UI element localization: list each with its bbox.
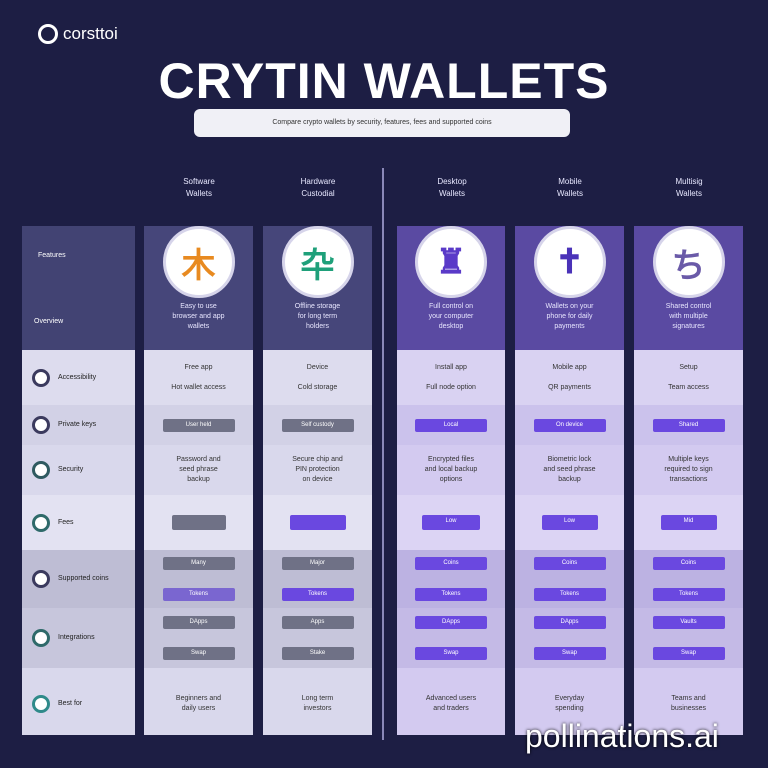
text: required to sign	[664, 466, 713, 473]
text: Low	[445, 518, 456, 524]
text: Many	[191, 560, 206, 566]
text: Tokens	[679, 591, 698, 597]
text: PIN protection	[295, 466, 340, 473]
text: Apps	[311, 619, 324, 625]
text: Shared control	[666, 303, 711, 310]
text: Full node option	[426, 384, 476, 390]
text: Everyday	[555, 694, 584, 702]
text: Tokens	[189, 591, 208, 597]
divider	[382, 168, 384, 740]
text: backup	[187, 476, 210, 483]
text: Mobile	[558, 177, 582, 186]
text: and traders	[433, 704, 469, 712]
text: Shared	[679, 422, 698, 428]
text: Coins	[681, 560, 696, 566]
text: Coins	[562, 560, 577, 566]
text: browser and app	[172, 313, 225, 320]
text: desktop	[439, 323, 463, 330]
text: Tokens	[308, 591, 327, 597]
text: Password and	[176, 456, 221, 463]
text: Custodial	[301, 189, 335, 198]
text: with multiple	[669, 313, 708, 320]
text: Swap	[562, 650, 577, 656]
text: Tokens	[441, 591, 460, 597]
label column: Fees	[58, 518, 74, 526]
text: phone for daily	[547, 313, 592, 320]
text: Wallets	[439, 189, 465, 198]
text: for long term	[298, 313, 337, 320]
text: Stake	[310, 650, 325, 656]
text: Low	[564, 518, 575, 524]
text: User held	[186, 422, 211, 428]
text: seed phrase	[179, 466, 218, 473]
text: Secure chip and	[292, 456, 343, 463]
text: Beginners and	[176, 694, 221, 702]
text: backup	[558, 476, 581, 483]
text: Free app	[184, 364, 213, 370]
text: Swap	[191, 650, 206, 656]
text: holders	[306, 323, 329, 330]
text: options	[440, 476, 462, 483]
text: Team access	[668, 384, 709, 390]
text: DApps	[560, 619, 578, 625]
label column: Supported coins	[58, 575, 109, 582]
subtitle bar: Compare crypto wallets by security, features, fees and supported coins	[272, 119, 492, 126]
text: ち	[672, 246, 706, 284]
text: Hardware	[301, 177, 335, 186]
text: Encrypted files	[428, 456, 474, 463]
text: Long term	[302, 694, 333, 702]
text: on device	[303, 476, 332, 483]
watermark: pollinations.ai	[525, 718, 719, 754]
text: Wallets	[676, 189, 702, 198]
text: 卆	[300, 246, 334, 284]
text: Full control on	[429, 303, 473, 310]
text: spending	[555, 704, 584, 712]
text: 木	[182, 246, 216, 284]
text: ✝	[555, 243, 584, 281]
text: Self custody	[301, 422, 334, 428]
text: Desktop	[437, 177, 467, 186]
text: transactions	[670, 476, 707, 483]
logo	[38, 24, 118, 44]
text: Major	[310, 560, 325, 566]
text: signatures	[672, 323, 705, 330]
text: DApps	[442, 619, 460, 625]
text: Multisig	[675, 177, 703, 186]
text: QR payments	[548, 384, 591, 390]
text: Offline storage	[295, 303, 340, 310]
text: Multiple keys	[668, 456, 709, 463]
label column: Overview	[34, 318, 63, 325]
text: Install app	[435, 364, 467, 370]
label column: Private keys	[58, 421, 96, 428]
text: Wallets on your	[546, 303, 593, 310]
text: DApps	[189, 619, 208, 625]
text: Coins	[443, 560, 459, 566]
text: wallets	[188, 323, 209, 330]
label column: Best for	[58, 700, 82, 706]
text: and local backup	[425, 466, 477, 473]
logo: corsttoi	[63, 24, 118, 43]
text: Setup	[679, 364, 698, 370]
text: payments	[554, 323, 585, 330]
label column	[22, 226, 135, 735]
text: Cold storage	[298, 384, 337, 390]
text: daily users	[182, 704, 215, 712]
subtitle bar	[194, 109, 570, 137]
text: Hot wallet access	[171, 384, 226, 390]
title: CRYTIN WALLETS	[158, 53, 610, 109]
text: Tokens	[560, 591, 579, 597]
text: Wallets	[186, 189, 212, 198]
text: Swap	[443, 650, 458, 656]
text: Mobile app	[552, 364, 587, 370]
wallet columns	[144, 226, 743, 735]
text: ♜	[436, 243, 466, 281]
text: Easy to use	[180, 303, 217, 310]
text: investors	[303, 704, 332, 712]
text: Biometric lock	[548, 456, 591, 463]
text: Mid	[684, 518, 693, 524]
text: Device	[307, 364, 328, 370]
text: Local	[444, 422, 458, 428]
text: On device	[556, 422, 583, 428]
text: your computer	[429, 313, 473, 320]
column headers	[183, 177, 703, 198]
text: and seed phrase	[543, 466, 596, 473]
text: Advanced users	[426, 694, 476, 702]
text: Software	[183, 177, 215, 186]
label column: Integrations	[58, 634, 95, 641]
text: Teams and	[671, 694, 706, 702]
text: Wallets	[557, 189, 583, 198]
label column: Features	[38, 252, 66, 259]
text: businesses	[671, 704, 706, 712]
label column: Security	[58, 466, 83, 473]
text: Vaults	[680, 619, 697, 625]
label column: Accessibility	[58, 374, 96, 380]
text: Swap	[681, 650, 696, 656]
